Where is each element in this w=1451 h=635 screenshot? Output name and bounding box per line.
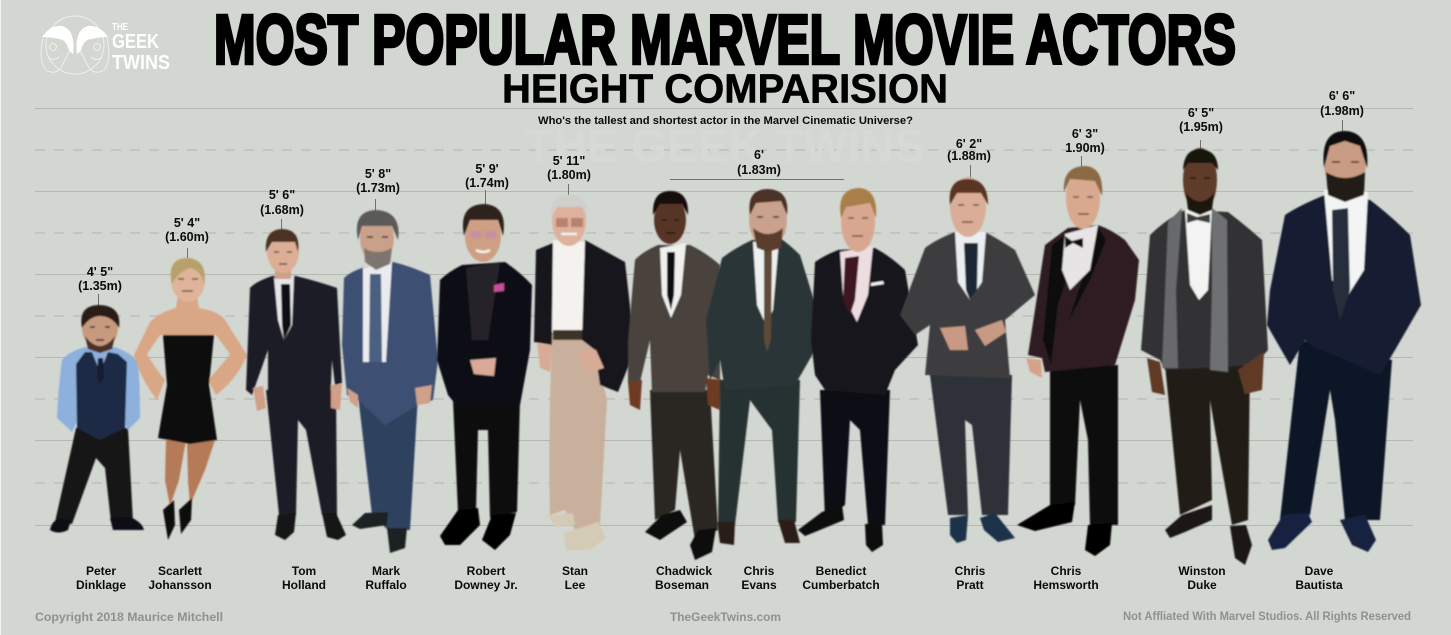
name: Winston Duke: [1178, 564, 1226, 592]
figure: Benedict Cumberbatch: [798, 188, 918, 552]
name: Chris Hemsworth: Chris: [1051, 564, 1082, 578]
figure: Stan Lee: [534, 195, 635, 550]
name: Benedict Cumberbatch: [802, 564, 880, 592]
height label: Dave Bautista: (1.98m): [1320, 104, 1364, 118]
figure: Chris Evans: [706, 189, 817, 545]
figure: Chadwick Boseman: [628, 191, 722, 560]
name: Robert Downey Jr.: Downey Jr.: [454, 578, 518, 592]
height label: Chris Pratt: [947, 137, 991, 180]
name: Benedict Cumberbatch: Benedict: [816, 564, 866, 578]
name: Dave Bautista: Dave: [1305, 564, 1334, 578]
height label: Tom Holland: 5' 6": [269, 188, 295, 202]
logo: The Geek Twins: TWINS: [112, 52, 170, 74]
figure: Tom Holland: [246, 229, 346, 540]
name: Benedict Cumberbatch: Cumberbatch: [802, 578, 880, 592]
name: Mark Ruffalo: Mark: [372, 564, 400, 578]
name: Dave Bautista: Bautista: [1295, 578, 1343, 592]
figure: Dave Bautista: [1267, 131, 1421, 552]
name: Chris Pratt: Chris: [955, 564, 986, 578]
figure: Robert Downey Jr.: [437, 204, 532, 550]
name: Stan Lee: Stan: [562, 564, 588, 578]
figure: Winston Duke: [1141, 148, 1268, 565]
height label: Scarlett Johansson: [165, 216, 209, 258]
name: Tom Holland: [282, 564, 326, 592]
figure: Scarlett Johansson: [134, 258, 247, 540]
name: Tom Holland: Holland: [282, 578, 326, 592]
name: Chadwick Boseman: Boseman: [655, 578, 709, 592]
height label: Stan Lee: 5' 11": [553, 154, 585, 168]
watermark: THE GEEK TWINS: [525, 120, 925, 172]
height label: Mark Ruffalo: [356, 167, 400, 211]
figure: Peter Dinklage: [50, 305, 144, 532]
figure: Mark Ruffalo: [342, 210, 438, 553]
height label: Tom Holland: (1.68m): [260, 203, 304, 217]
footer: disclaimer: Not Affliated With Marvel Studios. All Rights Reserved: [1123, 609, 1411, 623]
name: Tom Holland: Tom: [292, 564, 316, 578]
name: Mark Ruffalo: [365, 564, 407, 592]
name: Scarlett Johansson: [148, 564, 212, 592]
name: Stan Lee: Lee: [565, 578, 586, 592]
height label: Winston Duke: 6' 5": [1188, 106, 1214, 120]
name: Scarlett Johansson: Johansson: [148, 578, 212, 592]
height label: Chris Hemsworth: 6' 3": [1072, 127, 1098, 141]
height label: group at 6 feet: 6': [754, 148, 764, 162]
logo: The Geek Twins: [41, 16, 170, 74]
name: Chris Pratt: Pratt: [956, 578, 984, 592]
height label: Tom Holland: [260, 188, 304, 230]
name: Peter Dinklage: [76, 564, 126, 592]
name: Dave Bautista: [1295, 564, 1343, 592]
name: Chris Evans: Chris: [744, 564, 775, 578]
name: Robert Downey Jr.: Robert: [467, 564, 505, 578]
footer: website: TheGeekTwins.com: [670, 610, 781, 624]
name: Chris Evans: Evans: [741, 578, 777, 592]
name: Chris Evans: [741, 564, 777, 592]
footer: copyright: Copyright 2018 Maurice Mitchell: [35, 610, 223, 624]
height label: group at 6 feet: [670, 148, 844, 180]
name: Scarlett Johansson: Scarlett: [158, 564, 202, 578]
height label: Mark Ruffalo: 5' 8": [365, 167, 391, 181]
height label: Winston Duke: (1.95m): [1179, 120, 1223, 134]
height label: Chris Hemsworth: 1.90m): [1065, 141, 1105, 155]
name: Chris Pratt: [955, 564, 986, 592]
name: Chris Hemsworth: [1033, 564, 1099, 592]
height label: Peter Dinklage: (1.35m): [78, 279, 122, 293]
name: Winston Duke: Duke: [1187, 578, 1217, 592]
name: Mark Ruffalo: Ruffalo: [365, 578, 407, 592]
logo: The Geek Twins: GEEK: [112, 31, 159, 53]
height label: Robert Downey Jr.: 5' 9': [475, 162, 499, 176]
name: Peter Dinklage: Peter: [86, 564, 116, 578]
height label: Scarlett Johansson: (1.60m): [165, 230, 209, 244]
height label: Stan Lee: [547, 154, 591, 195]
subtitle heading: HEIGHT COMPARISION: [502, 66, 948, 112]
name: Robert Downey Jr.: [454, 564, 518, 592]
height label: Robert Downey Jr.: (1.74m): [465, 176, 509, 190]
height label: Chris Pratt: (1.88m): [947, 149, 991, 163]
name: Chadwick Boseman: [655, 564, 712, 592]
name: Chadwick Boseman: Chadwick: [656, 564, 712, 578]
height label: Peter Dinklage: [78, 265, 122, 306]
height label: Chris Pratt: 6' 2": [956, 137, 982, 151]
height label: Dave Bautista: [1320, 89, 1364, 133]
figure: Chris Hemsworth: [1017, 166, 1139, 556]
height label: Peter Dinklage: 4' 5": [87, 265, 113, 279]
height label: Stan Lee: (1.80m): [547, 168, 591, 182]
height label: Mark Ruffalo: (1.73m): [356, 181, 400, 195]
height label: Winston Duke: [1179, 106, 1223, 150]
name: Chris Hemsworth: Hemsworth: [1033, 578, 1099, 592]
tagline: Who's the tallest and shortest actor in the Marvel Cinematic Universe?: [538, 115, 913, 127]
logo: The Geek Twins: THE: [112, 22, 128, 33]
name: Peter Dinklage: Dinklage: [76, 578, 126, 592]
height label: Scarlett Johansson: 5' 4": [174, 216, 200, 230]
height label: Chris Hemsworth: [1065, 127, 1105, 167]
name: Stan Lee: [562, 564, 588, 592]
height label: Dave Bautista: 6' 6": [1329, 89, 1355, 103]
name: Winston Duke: Winston: [1178, 564, 1226, 578]
figure: Chris Pratt: [900, 177, 1035, 543]
height label: group at 6 feet: (1.83m): [737, 163, 781, 177]
height label: Robert Downey Jr.: [465, 162, 509, 205]
